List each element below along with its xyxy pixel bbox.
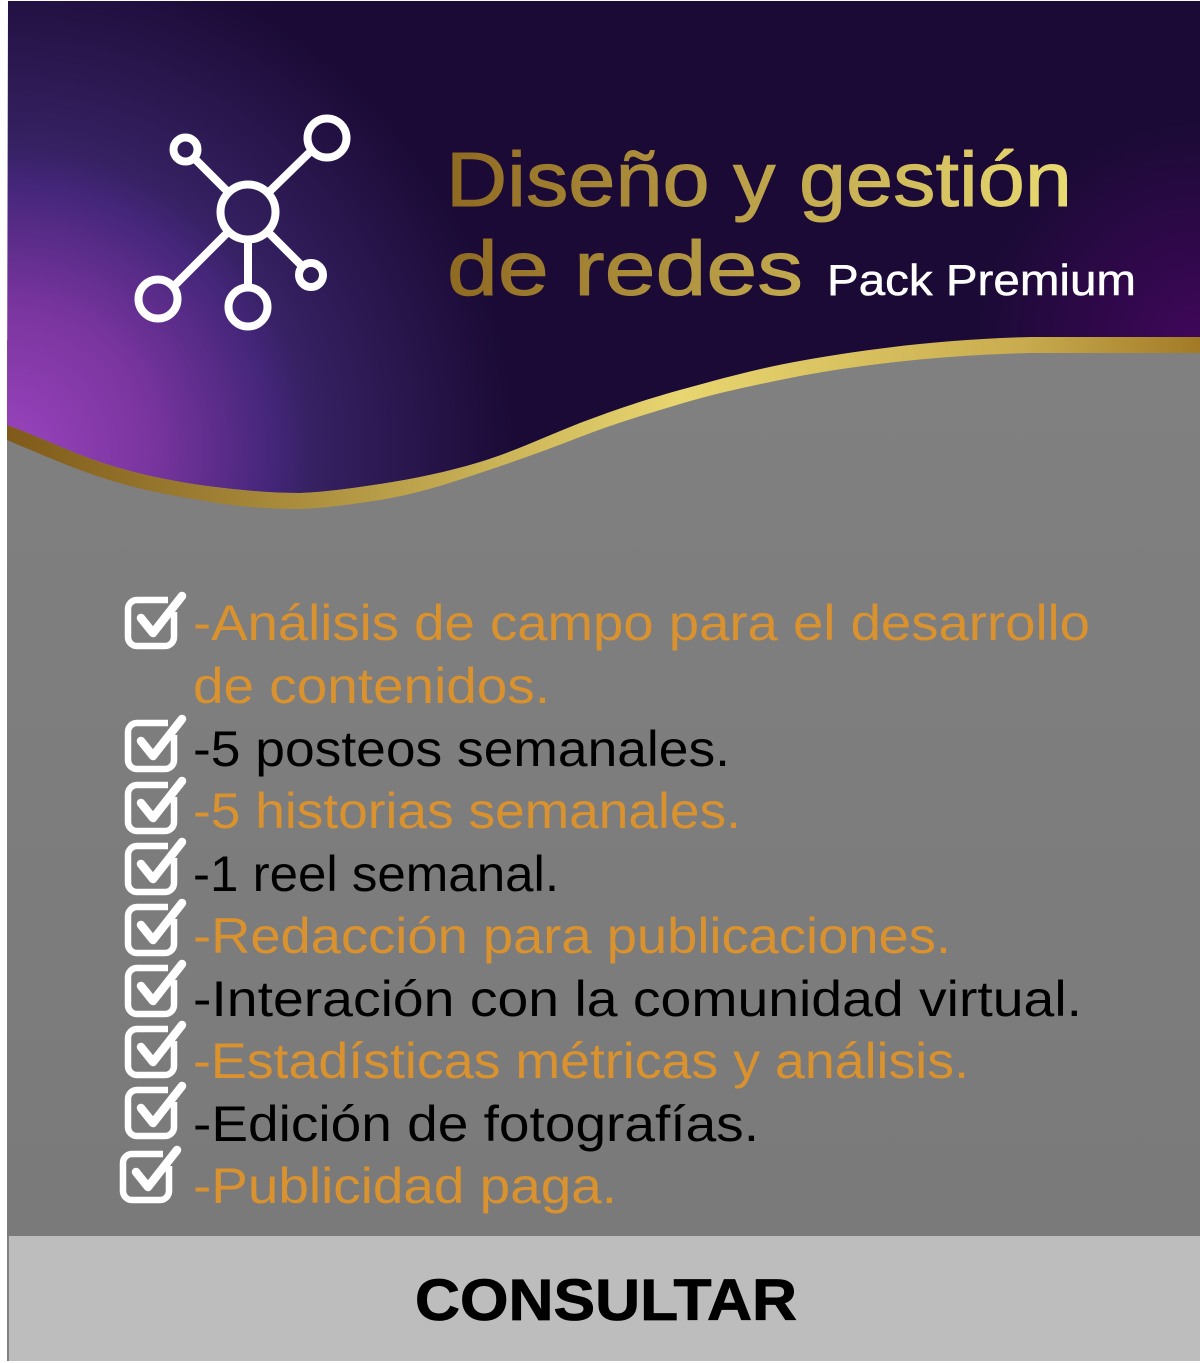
gold wave stripe bbox=[7, 337, 1200, 509]
item 8 text: -Edición de fotografías. bbox=[193, 1096, 759, 1152]
header panel with gradient bbox=[7, 1, 1200, 493]
item 1 text: -Análisis de campo para el desarrollo bbox=[193, 595, 1090, 651]
footer button bbox=[7, 1236, 1200, 1361]
item 7 check icon bbox=[128, 1025, 182, 1075]
item 6 check icon bbox=[128, 964, 182, 1014]
item 9 text: -Publicidad paga. bbox=[193, 1158, 617, 1214]
title: Diseño y gestión bbox=[446, 137, 1072, 223]
subtitle: Pack Premium: Pack Premium bbox=[827, 256, 1136, 305]
item 4 text: -1 reel semanal. bbox=[193, 846, 559, 902]
item 3 check icon bbox=[128, 781, 182, 831]
page background panel bbox=[7, 340, 1200, 1237]
item 4 check icon bbox=[128, 842, 182, 892]
icon: network nodes bbox=[138, 118, 346, 326]
title bbox=[446, 137, 1072, 312]
item 8 check icon bbox=[128, 1086, 182, 1136]
item 5 text: -Redacción para publicaciones. bbox=[193, 908, 951, 964]
title: de redes bbox=[447, 226, 803, 312]
item 7 text: -Estadísticas métricas y análisis. bbox=[193, 1033, 969, 1089]
item 2 check icon bbox=[128, 719, 182, 769]
item 2 text: -5 posteos semanales. bbox=[193, 721, 730, 777]
item 5 check icon bbox=[128, 903, 182, 953]
item 3 text: -5 historias semanales. bbox=[193, 783, 741, 839]
item 9 check icon bbox=[123, 1150, 177, 1200]
item 1 text: de contenidos. bbox=[193, 658, 550, 714]
item 1 text bbox=[193, 595, 1090, 714]
item 1 check icon bbox=[128, 596, 182, 646]
item 6 text: -Interación con la comunidad virtual. bbox=[193, 971, 1082, 1027]
button label: CONSULTAR bbox=[415, 1268, 797, 1333]
checklist bbox=[123, 595, 1090, 1214]
